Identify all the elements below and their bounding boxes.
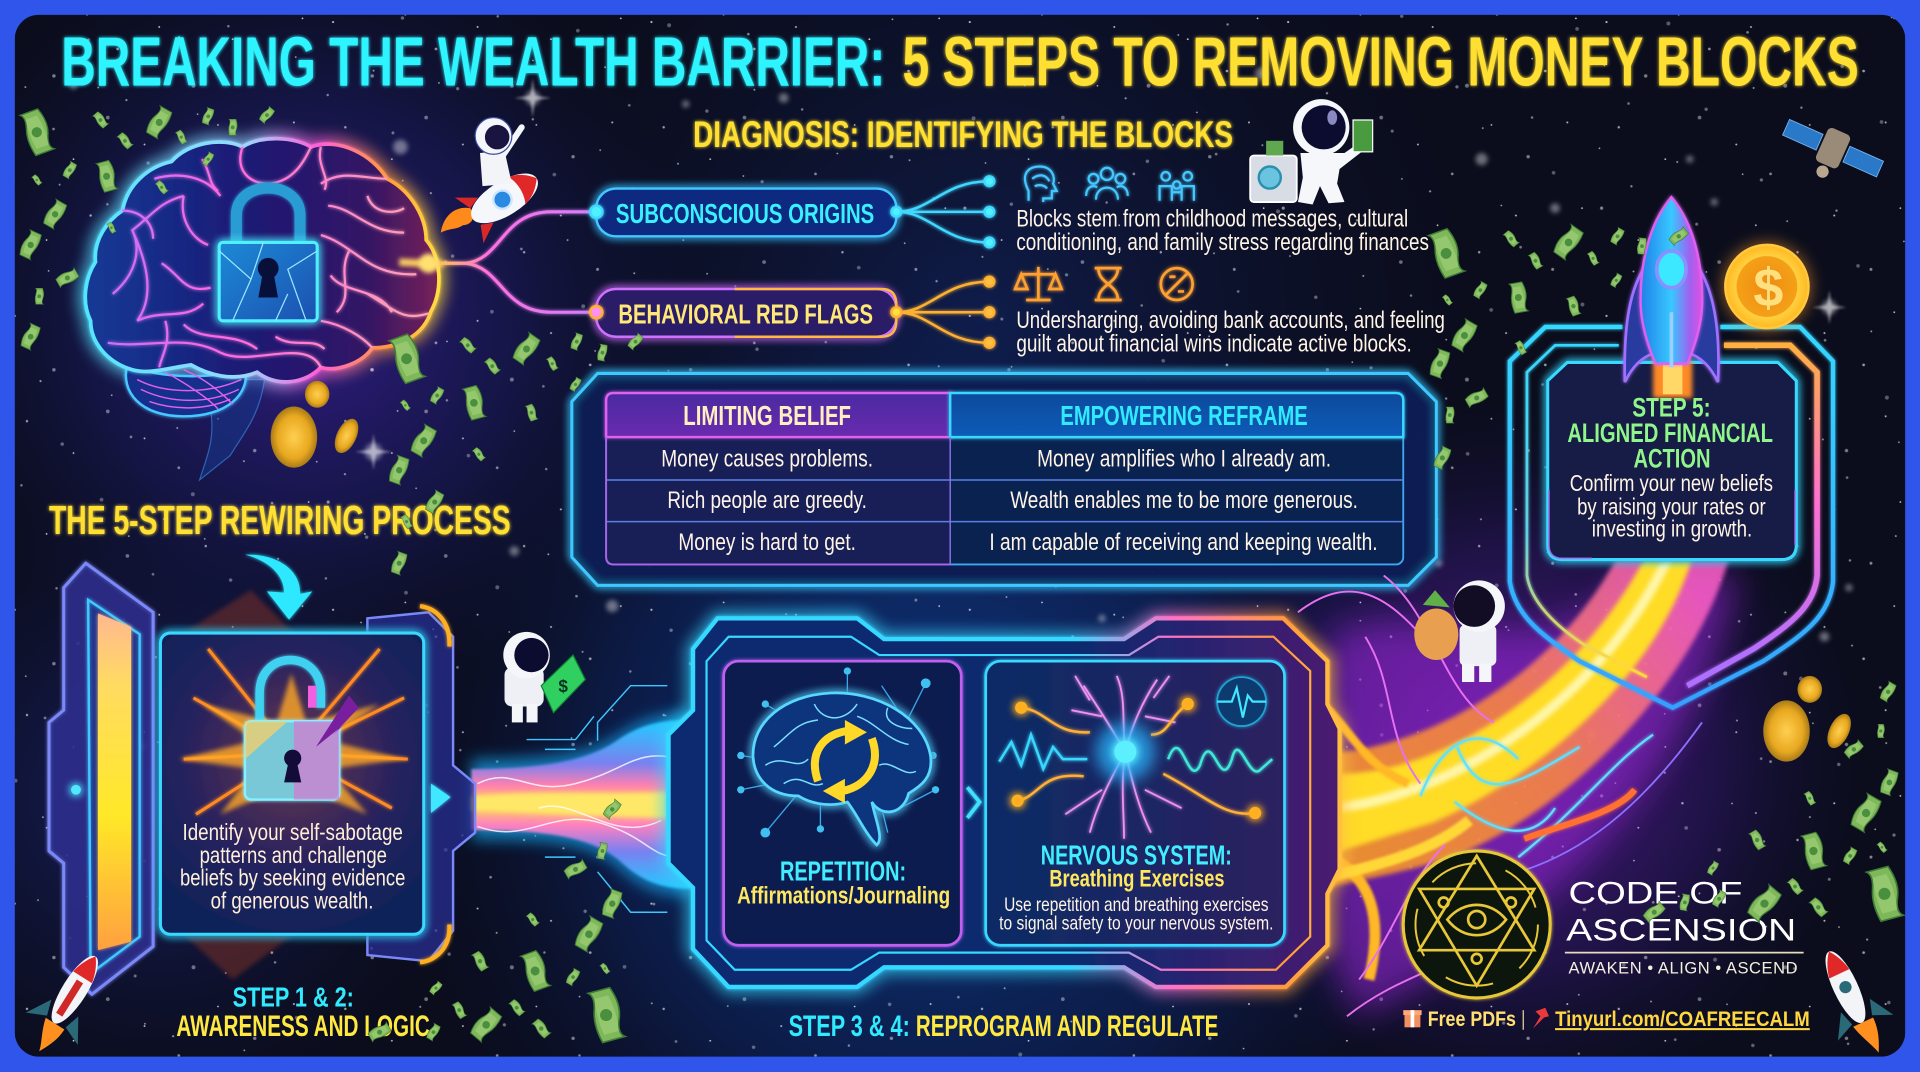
purple haze	[1329, 575, 1739, 1016]
panel: subconscious origins	[590, 167, 1429, 256]
panel: step 1 and 2	[49, 563, 475, 994]
nervous title: NERVOUS SYSTEM:	[1041, 839, 1232, 870]
step 5 text line 1: Confirm your new beliefs	[1570, 470, 1773, 496]
description line 2: conditioning, and family stress regarding finances	[1016, 229, 1429, 256]
icon: arrow right	[431, 784, 451, 813]
main box	[160, 633, 424, 934]
row 2 right: Wealth enables me to be more generous.	[1010, 487, 1358, 514]
table frame	[572, 373, 1436, 585]
pill	[596, 289, 896, 337]
branch lines	[590, 176, 994, 247]
bright core	[1329, 558, 1668, 808]
diagnosis heading: DIAGNOSIS: IDENTIFYING THE BLOCKS	[693, 114, 1233, 155]
astronaut with money bag	[1414, 580, 1505, 682]
mini rocket bottom left	[12, 941, 123, 1067]
rear frame	[367, 612, 475, 961]
astronaut holding cash: $	[558, 676, 568, 696]
nervous text line 2: to signal safety to your nervous system.	[999, 912, 1273, 934]
label: step 3 and 4 cyan: STEP 3 & 4:	[789, 1010, 910, 1043]
footer link	[1403, 1008, 1810, 1031]
icon: neuron	[999, 676, 1272, 839]
icon: rocket	[1625, 197, 1718, 398]
arrow: cyan entry arrow	[245, 555, 312, 620]
coins lower right	[1763, 676, 1856, 762]
logo: code of ascension emblem	[1403, 851, 1550, 998]
brand wordmark	[1565, 875, 1804, 977]
icons: scale, hourglass, no percent	[1015, 267, 1193, 300]
free pdfs text: Free PDFs	[1428, 1008, 1516, 1031]
pill label: SUBCONSCIOUS ORIGINS	[616, 198, 874, 229]
astronaut holding cash	[503, 632, 585, 722]
branch lines	[590, 277, 994, 348]
side branches	[1298, 575, 1702, 1016]
repetition subtitle: Affirmations/Journaling	[737, 883, 950, 910]
step 1-2 text line 2: patterns and challenge	[200, 842, 387, 868]
connector lines from brain to pills	[441, 212, 590, 312]
icon: padlock	[219, 188, 317, 321]
panel: repetition	[724, 661, 961, 945]
row 1 right: Money amplifies who I already am.	[1037, 446, 1331, 473]
step 1-2 text line 1: Identify your self-sabotage	[182, 819, 403, 845]
url: Tinyurl.com/COAFREECALM	[1555, 1008, 1810, 1031]
inner box	[1548, 362, 1796, 560]
step 5 title line 3: ACTION	[1633, 444, 1711, 474]
row 2 left: Rich people are greedy.	[667, 487, 867, 514]
box	[986, 661, 1284, 945]
label: step 1 and 2 line 1: STEP 1 & 2:	[233, 981, 354, 1012]
energy stream: steps 1-2 to 3-4	[471, 686, 692, 912]
title part: cyan: BREAKING THE WEALTH BARRIER:	[61, 23, 885, 101]
step 1-2 text line 4: of generous wealth.	[211, 888, 373, 914]
brand line 2: ASCENSION	[1566, 911, 1796, 947]
energy streams: step 4 to step 5	[1298, 558, 1739, 1016]
label: step 1 and 2 line 2: AWARENESS AND LOGIC	[176, 1010, 430, 1043]
title	[61, 23, 1859, 101]
panel: behavioral red flags	[590, 267, 1445, 357]
icon: pin	[1533, 1008, 1549, 1029]
step 5 text line 2: by raising your rates or	[1577, 493, 1766, 519]
icon: open padlock	[245, 660, 359, 800]
description: Undersharging, avoiding bank accounts, and feeling	[1016, 307, 1445, 334]
label: step 3 and 4 yellow: REPROGRAM AND REGULATE	[916, 1010, 1218, 1043]
box	[724, 661, 961, 945]
row 3 right: I am capable of receiving and keeping wealth.	[989, 529, 1378, 556]
icon: dollar coin: $	[1753, 258, 1783, 318]
step 5 text line 3: investing in growth.	[1592, 515, 1752, 541]
yellow fan	[1329, 558, 1692, 855]
icon: pulse circle	[1217, 677, 1266, 726]
astronaut with safe and cash	[1250, 99, 1373, 204]
step 1-2 text line 3: beliefs by seeking evidence	[180, 864, 405, 890]
right header	[950, 393, 1403, 437]
left column tint	[607, 438, 950, 564]
glowing door panel	[98, 613, 131, 950]
coins under brain	[271, 381, 363, 468]
table body	[606, 393, 1403, 564]
illustration: glowing brain with lock	[85, 139, 443, 480]
icon: refresh arrows	[815, 731, 875, 791]
outer shield frame	[1510, 327, 1833, 708]
outer pink fan	[1329, 558, 1729, 888]
icon: gift	[1403, 1010, 1422, 1027]
orange corner brackets	[420, 606, 449, 962]
pill label: BEHAVIORAL RED FLAGS	[618, 298, 873, 329]
brand tagline: AWAKEN • ALIGN • ASCEND	[1569, 958, 1798, 977]
header text right: EMPOWERING REFRAME	[1060, 400, 1308, 431]
header text left: LIMITING BELIEF	[683, 400, 851, 431]
row 1 left: Money causes problems.	[661, 446, 873, 473]
process heading: THE 5-STEP REWIRING PROCESS	[49, 497, 511, 543]
description line 2: guilt about financial wins indicate active blocks.	[1016, 330, 1412, 357]
icon: network brain	[737, 667, 939, 845]
mini rocket bottom right	[1802, 938, 1905, 1066]
frame glow	[669, 618, 1340, 987]
icons: head, people, family	[1025, 167, 1194, 202]
burst rays	[184, 649, 408, 814]
icon: dollar coin	[1723, 242, 1811, 331]
description: Blocks stem from childhood messages, cultural	[1016, 206, 1408, 233]
satellite	[1773, 110, 1887, 198]
warm light wedges	[184, 590, 294, 980]
step 5 title line 1: STEP 5:	[1632, 392, 1711, 422]
pill	[596, 189, 896, 236]
brand line 1: CODE OF	[1569, 875, 1742, 911]
panel: step 3 and 4	[669, 618, 1340, 987]
nervous text line 1: Use repetition and breathing exercises	[1004, 894, 1269, 916]
left doorway frame	[49, 563, 153, 994]
panel: nervous system	[986, 661, 1284, 945]
outer frame	[669, 618, 1340, 987]
left header	[606, 393, 950, 437]
panel: step 5	[1510, 197, 1833, 708]
connector chevron	[967, 787, 980, 818]
row 3 left: Money is hard to get.	[678, 529, 856, 556]
repetition title: REPETITION:	[780, 855, 906, 886]
astronaut riding rocket	[441, 118, 551, 243]
panel: belief reframe table	[572, 373, 1436, 585]
nervous subtitle: Breathing Exercises	[1049, 865, 1224, 892]
step 5 title line 2: ALIGNED FINANCIAL	[1567, 418, 1773, 448]
